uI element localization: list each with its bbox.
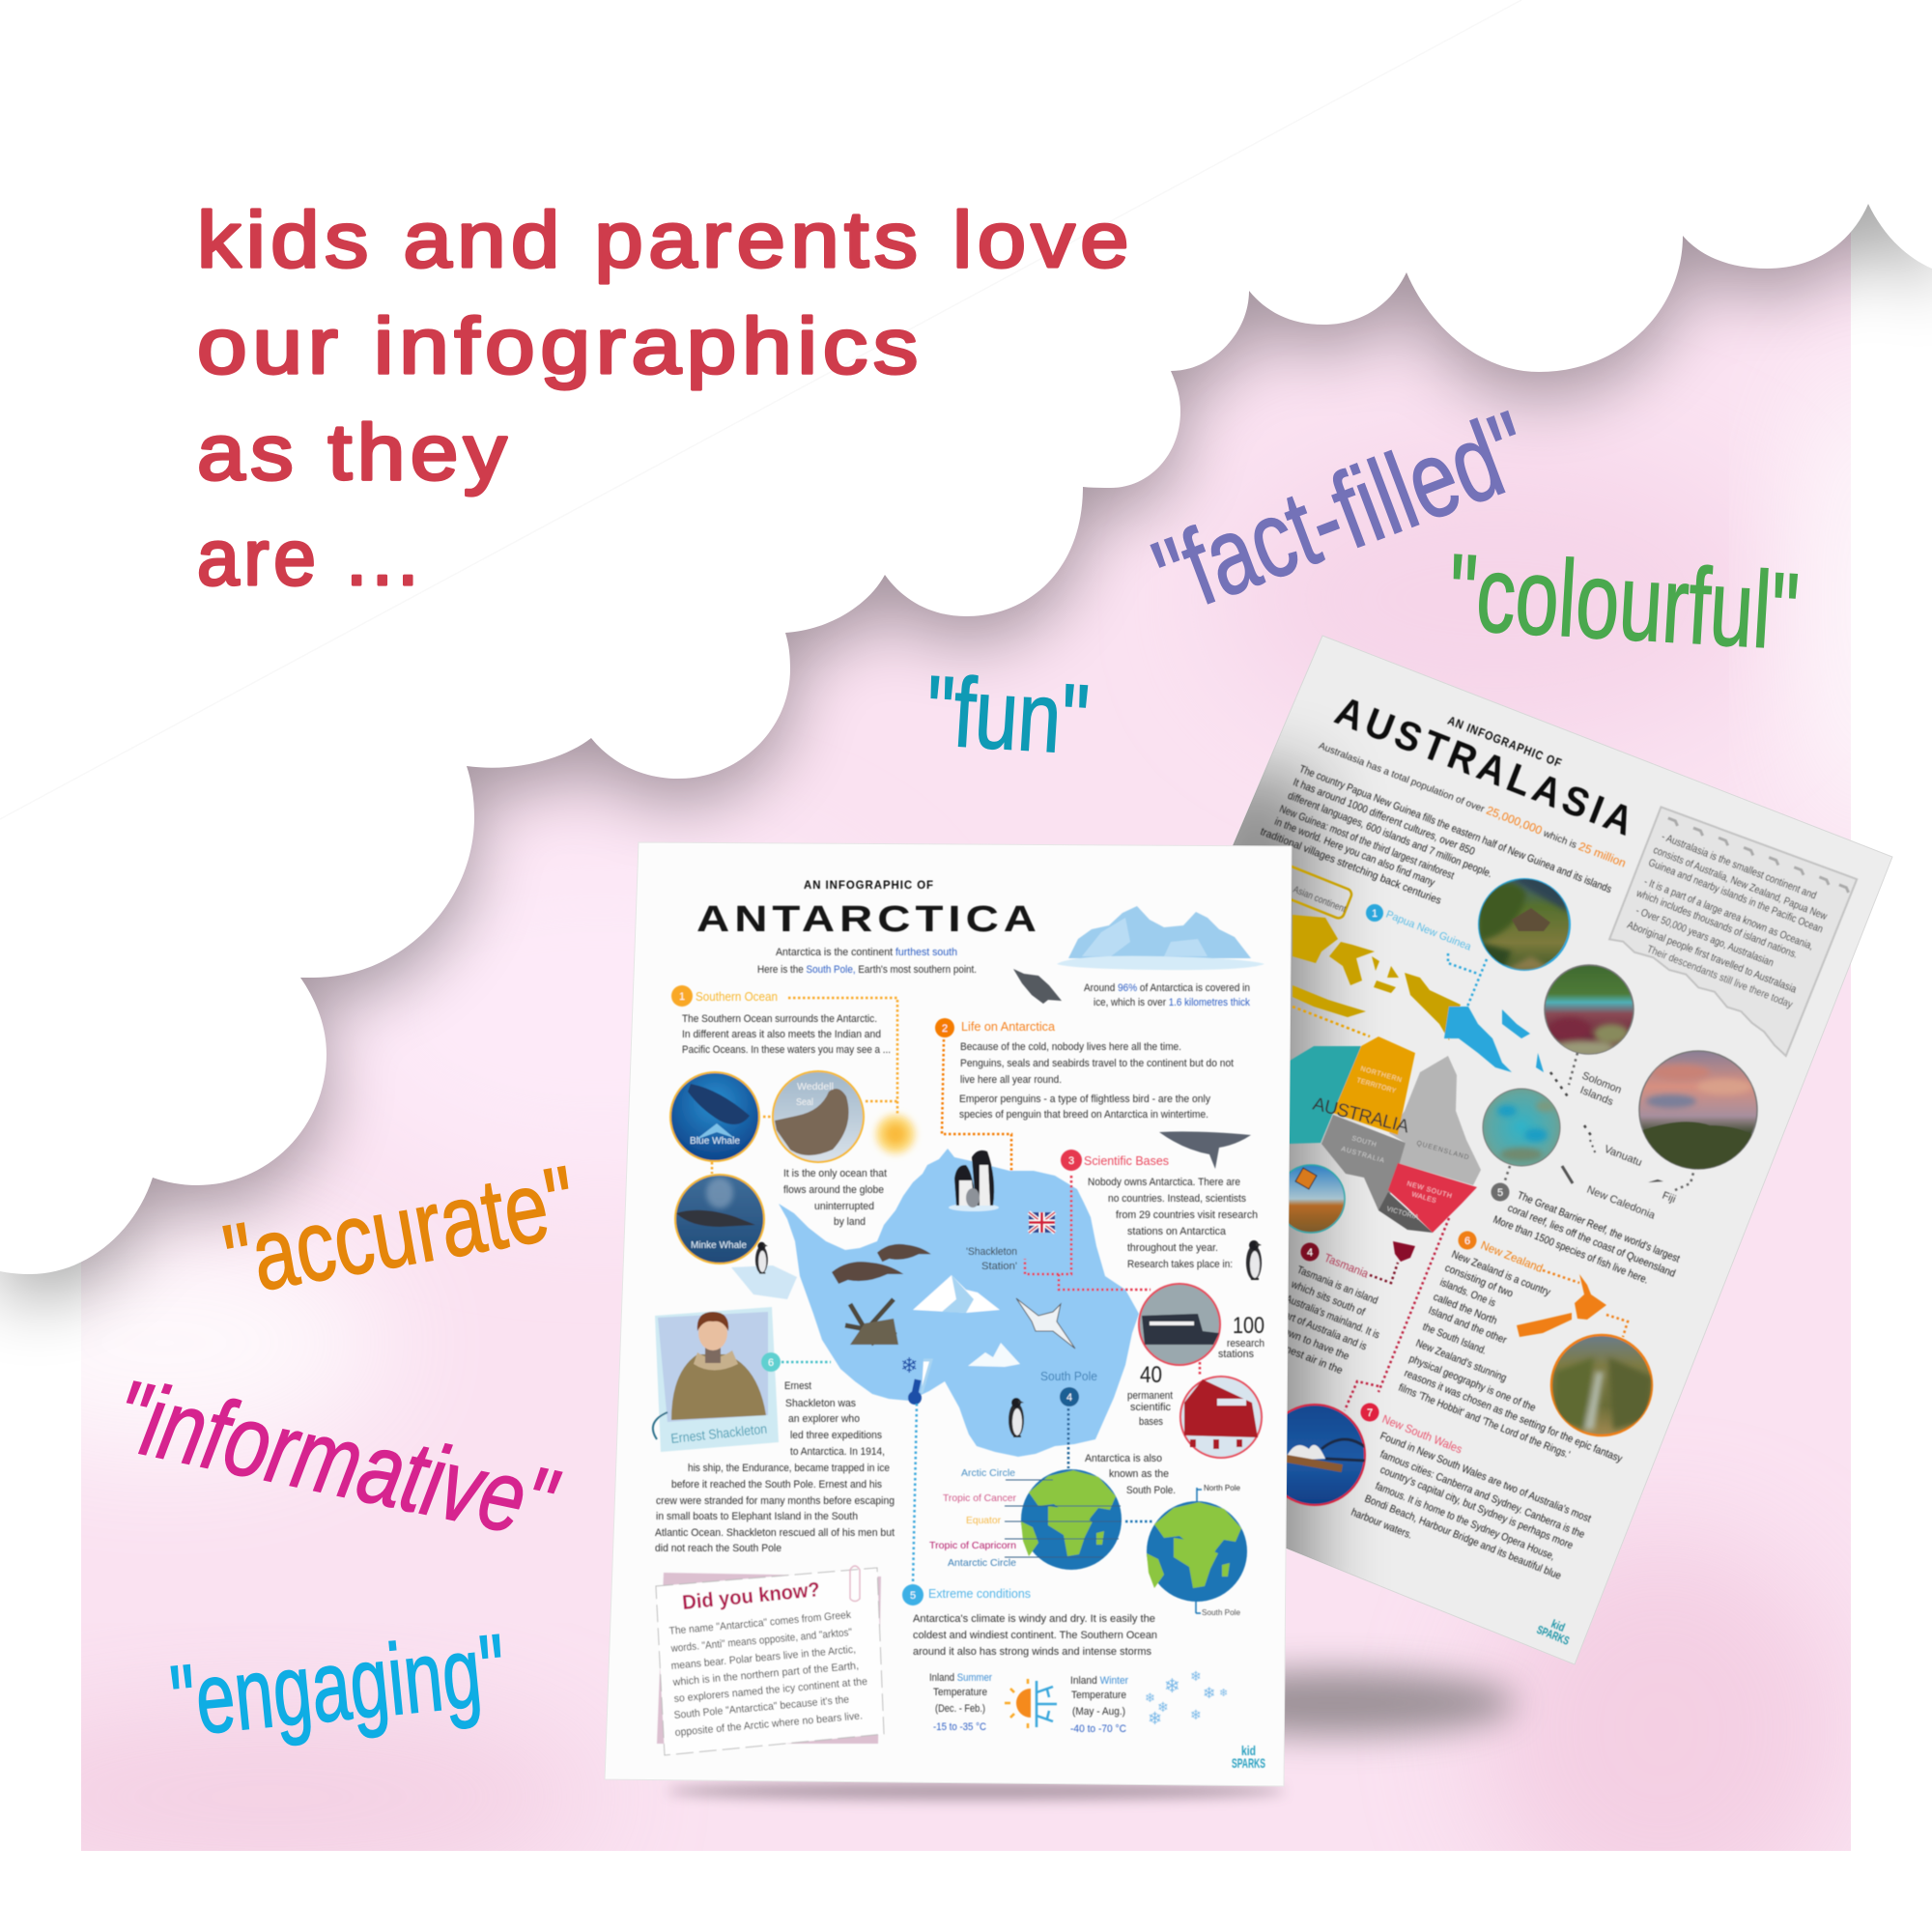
card: Did you know: which is in the northern part of the Earth,: [671, 1661, 859, 1689]
quote: fact-filled: "fact-filled": [1139, 388, 1546, 638]
card: Did you know: opposite of the Arctic where no bears live.: [674, 1710, 863, 1739]
section 4: South Pole: [1040, 1369, 1176, 1496]
section: New Zealand: called the North: [1432, 1292, 1498, 1327]
card: Did you know: means bear. Polar bears live in the Arctic,: [670, 1644, 856, 1672]
section 6: Shackleton text: led three expeditions: [790, 1430, 882, 1441]
section: New South Wales: Found in New South Wales are two of Australia's most: [1378, 1431, 1593, 1525]
icon: snowflakes: [1145, 1668, 1228, 1728]
section: Great Barrier Reef: The Great Barrier Reef, the world's largest: [1516, 1190, 1681, 1265]
globe with latitude lines: Equator: [966, 1515, 1001, 1526]
stat: inland summer temperature: -15 to -35 °C: [933, 1721, 986, 1733]
quote: fun: "fun": [923, 655, 1092, 775]
section 2: Life on Antarctica: Life on Antarctica: [961, 1019, 1056, 1034]
photo: Great Barrier Reef: [1483, 1089, 1560, 1166]
section 5: Extreme conditions: coldest and windiest continent. The Southern Ocean: [913, 1630, 1157, 1641]
icon: snowflakes: ❄: [1157, 1699, 1169, 1715]
heading: our infographics: [197, 302, 923, 390]
icon: snowflakes: ❄: [1190, 1707, 1202, 1722]
quote: engaging: "engaging": [166, 1614, 511, 1758]
Australasia title block: Australasia has a total population of over 25,000,000 which is 25 million: [1317, 738, 1628, 870]
icon: snowflakes: ❄: [1203, 1686, 1215, 1702]
section: New Zealand: New Zealand's stunning: [1414, 1338, 1508, 1384]
section 3: Scientific Bases: Scientific Bases: [1084, 1153, 1169, 1168]
section 1: Southern Ocean: 1: [679, 991, 685, 1003]
text: ice coverage: Around 96% of Antarctica is covered in: [1084, 982, 1250, 994]
quote: informative: "informative": [105, 1359, 566, 1562]
icon: UK flag: [1029, 1212, 1055, 1233]
stat: inland summer temperature: Inland Summer: [929, 1672, 992, 1684]
section: New Zealand: 6: [1464, 1236, 1470, 1247]
section 1: Southern Ocean: The Southern Ocean surrounds the Antarctic.: [682, 1013, 877, 1025]
section 1: Southern Ocean: Southern Ocean: [696, 989, 778, 1004]
photo: Minke Whale: [675, 1175, 764, 1264]
quote: colourful: "colourful": [1446, 531, 1802, 672]
section: New Zealand: [1397, 1231, 1628, 1465]
section: New Zealand: consisting of two: [1443, 1263, 1515, 1300]
section: New South Wales: Bondi Beach, Harbour Bridge and its beautiful blue: [1363, 1493, 1563, 1582]
icon: snowflakes: ❄: [1190, 1668, 1202, 1684]
section 5: Extreme conditions: [902, 1404, 1157, 1658]
icon: thermometer and snowflake: [900, 1353, 931, 1405]
stat: 40 permanent scientific bases: permanent: [1127, 1390, 1173, 1402]
Australasia title block: traditional villages stretching back centuries: [1259, 826, 1443, 907]
photo: Papua New Guinea village: [1478, 874, 1570, 971]
section: Great Barrier Reef: [1492, 1166, 1681, 1287]
Australasia title block: It has around 1000 different cultures, over 850: [1292, 777, 1476, 858]
photo: Blue Whale: Blue Whale: [690, 1136, 740, 1147]
portrait card: Ernest Shackleton: Ernest Shackleton: [670, 1421, 768, 1446]
globe with latitude lines: Tropic of Capricorn: [929, 1540, 1016, 1551]
label: Papua New Guinea: 1: [1372, 908, 1378, 920]
icon: shipwreck: [845, 1299, 898, 1345]
section 3: Scientific Bases: Research takes place in:: [1127, 1259, 1233, 1270]
section: Great Barrier Reef: More than 1500 species of fish live here.: [1492, 1214, 1650, 1287]
photo: Halley research base: [1180, 1377, 1262, 1458]
globe with latitude lines: Antarctic Circle: [948, 1557, 1016, 1569]
section 6: Shackleton text: Shackleton was: [785, 1398, 856, 1409]
note panel: consists of Australia, New Zealand, Papua New: [1652, 844, 1829, 923]
section 3: Scientific Bases: Nobody owns Antarctica. There are: [1088, 1177, 1240, 1188]
section: Great Barrier Reef: 5: [1497, 1187, 1503, 1199]
Australia states map: VICTORIA: [1385, 1206, 1419, 1221]
section: Tasmania: cleanest air in the: [1266, 1337, 1344, 1377]
text: ice coverage: [1084, 982, 1250, 1009]
note panel: Their descendants still live there today: [1645, 944, 1795, 1010]
section: New South Wales: famous cities: Canberra and Sydney. Canberra is the: [1378, 1449, 1586, 1541]
section 5: Extreme conditions: Extreme conditions: [928, 1586, 1031, 1601]
globe with latitude lines: Tropic of Cancer: [943, 1492, 1016, 1504]
text: only ocean: It is the only ocean that: [783, 1168, 887, 1179]
labels: Vanuatu, New Caledonia, Fiji: Vanuatu: [1603, 1144, 1643, 1169]
photo: research ship station: [1139, 1284, 1220, 1365]
sheet shadow under Antarctica: [667, 1782, 1285, 1800]
section 1: Southern Ocean: In different areas it also meets the Indian and: [682, 1029, 881, 1040]
card: Did you know: [656, 1566, 884, 1755]
globe with poles: South Pole: [1202, 1608, 1241, 1617]
section: New South Wales: country's capital city, but Sydney is perhaps more: [1378, 1464, 1575, 1551]
note panel: - It is a part of a large area known as Oceania,: [1642, 876, 1815, 952]
icon: emperor penguins: [949, 1151, 999, 1211]
section 5: Extreme conditions: 5: [910, 1590, 916, 1602]
section: Tasmania: part of Australia and is: [1278, 1308, 1369, 1353]
text: only ocean: flows around the globe: [783, 1184, 884, 1196]
section: New Zealand: reasons it was chosen as the setting for the epic fantasy: [1403, 1368, 1624, 1465]
section 4: South Pole: known as the: [1109, 1468, 1169, 1480]
photo: Solomon Islands: [1545, 965, 1634, 1055]
quote: accurate: "accurate": [216, 1146, 583, 1318]
icon: penguin on map: [1009, 1398, 1024, 1437]
section: New South Wales: famous. It is home to the Sydney Opera House,: [1374, 1481, 1556, 1563]
icon: half sun half snowflake: [1005, 1679, 1057, 1728]
text: only ocean: [783, 1168, 887, 1228]
section 6: Shackleton text: Ernest: [784, 1380, 811, 1392]
icon: albatross: [1016, 1298, 1075, 1349]
icon: snowflakes: ❄: [1164, 1676, 1180, 1697]
label: Papua New Guinea: [1366, 904, 1487, 1007]
icon: snowflakes: ❄: [1219, 1688, 1228, 1699]
icon: snowflakes: ❄: [1145, 1690, 1155, 1705]
title: Antarctica: Antarctica is the continent furthest south: [776, 947, 957, 958]
note panel: Aboriginal people first travelled to Australasia: [1626, 920, 1799, 996]
icon: seals: [832, 1244, 931, 1284]
photo: Weddell Seal: [773, 1071, 864, 1162]
section: Tasmania: Tasmania: [1322, 1251, 1371, 1281]
Australasia title block: AN INFOGRAPHIC OF: [1446, 714, 1564, 771]
panel: Antarctica sheet: [605, 842, 1292, 1786]
note panel: which includes thousands of island nations.: [1634, 888, 1799, 961]
photo: Weddell Seal: Seal: [796, 1097, 813, 1108]
label: Shackleton Station: [966, 1246, 1017, 1272]
stat: 100 research stations: research: [1227, 1338, 1264, 1350]
section 2: Life on Antarctica: [935, 1018, 1234, 1171]
Australasia map: Asian islands and Papua New Guinea: [1293, 915, 1594, 1140]
photo: kangaroo road sign: [1277, 1165, 1345, 1233]
icon: small mountains: [968, 1343, 1020, 1367]
section: New Zealand: films 'The Hobbit' and 'The Lord of the Rings.': [1397, 1382, 1572, 1461]
section: New South Wales: [1345, 1218, 1593, 1582]
photo: New Zealand valley: [1551, 1335, 1652, 1435]
logo: Kid Sparks on Australasia: SPARKS: [1535, 1623, 1572, 1648]
panel: Australasia sheet: [1198, 636, 1892, 1664]
photo: Weddell Seal: Weddell: [797, 1082, 834, 1093]
section 6: Shackleton text: an explorer who: [788, 1413, 860, 1425]
card: Did you know: South Pole "Antarctica" because it's the: [673, 1694, 850, 1721]
section 1: Southern Ocean: [671, 985, 897, 1174]
note panel: - Over 50,000 years ago, Australasian: [1634, 905, 1776, 969]
photo: Minke Whale: Minke Whale: [691, 1240, 747, 1251]
note panel: - Australasia is the smallest continent and: [1660, 831, 1818, 902]
Australia states map: SOUTH: [1350, 1135, 1377, 1149]
section: New Zealand: the South Island.: [1421, 1321, 1488, 1357]
globe with latitude lines: [929, 1467, 1122, 1570]
Australia states map: TERRITORY: [1355, 1077, 1397, 1095]
Australasia title block: AUSTRALASIA: [1329, 687, 1644, 845]
Australia states map: [1256, 1007, 1481, 1262]
stat: 40 permanent scientific bases: [1127, 1362, 1173, 1428]
stat: 40 permanent scientific bases: bases: [1139, 1416, 1163, 1428]
label: Shackleton Station: Station': [981, 1261, 1017, 1272]
section 5: Extreme conditions: around it also has strong winds and intense storms: [913, 1646, 1151, 1658]
heading: kids and parents love: [197, 196, 1134, 284]
stat: inland winter temperature: (May - Aug.): [1072, 1706, 1125, 1718]
labels: Vanuatu, New Caledonia, Fiji: [1562, 1140, 1694, 1222]
section 1: Southern Ocean: Pacific Oceans. In these waters you may see a ...: [682, 1044, 891, 1056]
section 3: Scientific Bases: [1025, 1150, 1258, 1375]
stat: inland winter temperature: -40 to -70 °C: [1070, 1723, 1126, 1735]
section 2: Life on Antarctica: live here all year round.: [960, 1074, 1062, 1086]
stat: 100 research stations: 100: [1233, 1313, 1264, 1339]
icon: penguin on ice floe: [731, 1242, 797, 1299]
section: New Zealand: New Zealand is a country: [1450, 1249, 1552, 1298]
icon: iceberg: [1057, 906, 1264, 970]
photo: Sydney Opera House: [1287, 1403, 1367, 1507]
Asian continent label: Asian continent: [1292, 885, 1348, 915]
photo: Fiji: [1637, 1051, 1758, 1174]
section 6: Shackleton text: to Antarctica. In 1914,: [790, 1446, 885, 1458]
icon: thermometer and snowflake: ❄: [900, 1353, 918, 1378]
globe with poles: North Pole: [1204, 1484, 1241, 1492]
section 3: Scientific Bases: no countries. Instead, scientists: [1108, 1193, 1246, 1205]
section 2: Life on Antarctica: Because of the cold, nobody lives here all the time.: [960, 1041, 1181, 1053]
labels: Vanuatu, New Caledonia, Fiji: New Caledonia: [1585, 1184, 1658, 1222]
section: Tasmania: [1266, 1242, 1398, 1377]
heading: as they: [197, 409, 512, 497]
Australasia title block: New Guinea: most of the third largest rainforest: [1278, 804, 1456, 882]
stat: 100 research stations: stations: [1218, 1349, 1254, 1360]
section: New South Wales: New South Wales: [1380, 1412, 1464, 1456]
section 4: South Pole: South Pole: [1040, 1369, 1097, 1383]
text: ice coverage: ice, which is over 1.6 kilometres thick: [1094, 997, 1250, 1009]
card: Did you know: The name "Antarctica" comes from Greek: [668, 1609, 852, 1637]
section: Tasmania: which sits south of: [1289, 1278, 1367, 1319]
icon: snowflakes: ❄: [1148, 1709, 1162, 1728]
section: New South Wales: harbour waters.: [1350, 1507, 1414, 1542]
section 2: Life on Antarctica: 2: [942, 1023, 948, 1035]
logo: Kid Sparks on Australasia: kid: [1549, 1617, 1567, 1634]
floor shadow behind sheets: [1150, 1670, 1517, 1736]
card: Did you know: Did you know?: [681, 1578, 821, 1614]
globe with poles: [1125, 1484, 1247, 1617]
portrait card: Ernest Shackleton: [653, 1307, 779, 1452]
label: Solomon Islands: Islands: [1578, 1085, 1615, 1108]
stat: inland summer temperature: Temperature: [933, 1687, 987, 1698]
icon: whale: [1159, 1131, 1251, 1169]
globe with latitude lines: Arctic Circle: [961, 1467, 1015, 1479]
section: New Zealand: New Zealand: [1479, 1238, 1545, 1275]
section 6: Shackleton text: [655, 1352, 895, 1554]
icon: diving seal: [1013, 969, 1062, 1004]
stat: 40 permanent scientific bases: 40: [1140, 1362, 1162, 1388]
section: Tasmania: Tasmania is an island: [1295, 1264, 1379, 1307]
section 6: Shackleton text: in small boats to Elephant Island in the South: [656, 1511, 858, 1522]
New Zealand map: [1517, 1274, 1606, 1337]
Australia states map: AUSTRALIA: [1340, 1146, 1385, 1165]
section: New Zealand: Island and the other: [1427, 1305, 1508, 1347]
white cloud shape: [0, 0, 1932, 1274]
icon: mountains: [913, 1275, 1000, 1313]
note panel: Guinea and nearby islands in the Pacific Ocean: [1647, 857, 1825, 935]
Australasia title block: in the world. Here you can also find many: [1273, 816, 1436, 889]
section 4: South Pole: South Pole.: [1126, 1485, 1176, 1496]
heading: are ...: [197, 514, 423, 602]
Australia states map: AUSTRALIA: [1311, 1094, 1411, 1138]
section 3: Scientific Bases: 3: [1068, 1155, 1074, 1167]
background: pink watercolour panel: [81, 232, 1851, 1851]
card: Did you know: so explorers named the icy continent at the: [673, 1676, 867, 1705]
Australasia title block: The country Papua New Guinea fills the eastern half of New Guinea and its islands: [1297, 763, 1613, 895]
section 6: Shackleton text: did not reach the South Pole: [655, 1543, 781, 1554]
stat: inland summer temperature: (Dec. - Feb.): [935, 1703, 985, 1715]
section 6: Shackleton text: 6: [768, 1357, 774, 1369]
section 3: Scientific Bases: from 29 countries visit research: [1116, 1209, 1258, 1221]
section 2: Life on Antarctica: Penguins, seals and seabirds travel to the continent but do not: [960, 1058, 1234, 1069]
card: Did you know: words. "Anti" means opposite, and "arktos": [669, 1627, 853, 1655]
Asian continent label: [1263, 860, 1353, 920]
Australia states map: WALES: [1410, 1191, 1437, 1205]
icon: penguin: [1246, 1240, 1262, 1280]
stat: inland summer temperature: [929, 1672, 992, 1733]
icon: sun: [876, 1115, 915, 1153]
section: Great Barrier Reef: coral reef, lies off the coast of Queensland: [1506, 1203, 1677, 1280]
section 3: Scientific Bases: stations on Antarctica: [1127, 1226, 1227, 1237]
logo: Kid Sparks on Antarctica: SPARKS: [1232, 1755, 1265, 1771]
Australasia title block: different languages, 600 islands and 7 million people.: [1286, 790, 1493, 880]
stat: 100 research stations: [1218, 1313, 1264, 1360]
cloud shadow: [0, 23, 1932, 1297]
stat: inland winter temperature: [1070, 1675, 1128, 1735]
map: Antarctica continent: [779, 1149, 1139, 1457]
section: New Zealand: islands. One is: [1438, 1277, 1497, 1310]
section 4: South Pole: Antarctica is also: [1085, 1453, 1162, 1464]
logo: Kid Sparks on Antarctica: kid: [1241, 1743, 1256, 1758]
section 6: Shackleton text: before it reached the South Pole. Ernest and his: [671, 1479, 882, 1491]
label: Solomon Islands: Solomon: [1580, 1070, 1623, 1096]
section 5: Extreme conditions: Antarctica's climate is windy and dry. It is easily the: [913, 1613, 1155, 1625]
text: only ocean: by land: [834, 1216, 866, 1228]
Australia states map: NEW SOUTH: [1406, 1180, 1453, 1200]
label: Papua New Guinea: Papua New Guinea: [1384, 909, 1473, 953]
stat: inland winter temperature: Inland Winter: [1070, 1675, 1128, 1687]
photo: Blue Whale: [670, 1072, 759, 1161]
section 4: South Pole: 4: [1066, 1392, 1072, 1404]
text: only ocean: uninterrupted: [814, 1201, 874, 1212]
Australia states map: NORTHERN: [1359, 1065, 1403, 1084]
section: New South Wales: 7: [1367, 1407, 1373, 1419]
logo: Kid Sparks on Antarctica: [1232, 1743, 1265, 1771]
section 6: Shackleton text: crew were stranded for many months before escaping: [656, 1495, 895, 1507]
heading: [197, 196, 1134, 602]
section: Tasmania: known to have the: [1272, 1322, 1350, 1363]
note panel: [1593, 804, 1857, 1057]
section: Tasmania: Australia's mainland. It is: [1284, 1293, 1381, 1342]
label: Shackleton Station: 'Shackleton: [966, 1246, 1017, 1258]
stat: inland winter temperature: Temperature: [1071, 1690, 1126, 1701]
Australasia title block: [1254, 665, 1860, 1057]
section: Tasmania: 4: [1307, 1247, 1313, 1259]
title: Antarctica: [696, 878, 1041, 976]
stat: 40 permanent scientific bases: scientific: [1130, 1402, 1171, 1413]
section 2: Life on Antarctica: Emperor penguins - a type of flightless bird - are the only: [959, 1094, 1210, 1105]
label: Solomon Islands: [1569, 1053, 1623, 1108]
logo: Kid Sparks on Australasia: [1535, 1617, 1572, 1648]
title: Antarctica: Here is the South Pole, Earth's most southern point.: [757, 964, 977, 976]
section 2: Life on Antarctica: species of penguin that breed on Antarctica in wintertime.: [959, 1109, 1208, 1121]
Australia states map: QUEENSLAND: [1415, 1140, 1469, 1161]
labels: Vanuatu, New Caledonia, Fiji: Fiji: [1661, 1190, 1677, 1206]
section 3: Scientific Bases: throughout the year.: [1127, 1242, 1218, 1254]
title: Antarctica: ANTARCTICA: [696, 899, 1041, 940]
title: Antarctica: AN INFOGRAPHIC OF: [804, 878, 934, 892]
section: New Zealand: physical geography is one of the: [1407, 1353, 1537, 1414]
section 6: Shackleton text: Atlantic Ocean. Shackleton rescued all of his men but: [655, 1527, 895, 1539]
section 6: Shackleton text: his ship, the Endurance, became trapped in ice: [688, 1463, 890, 1474]
